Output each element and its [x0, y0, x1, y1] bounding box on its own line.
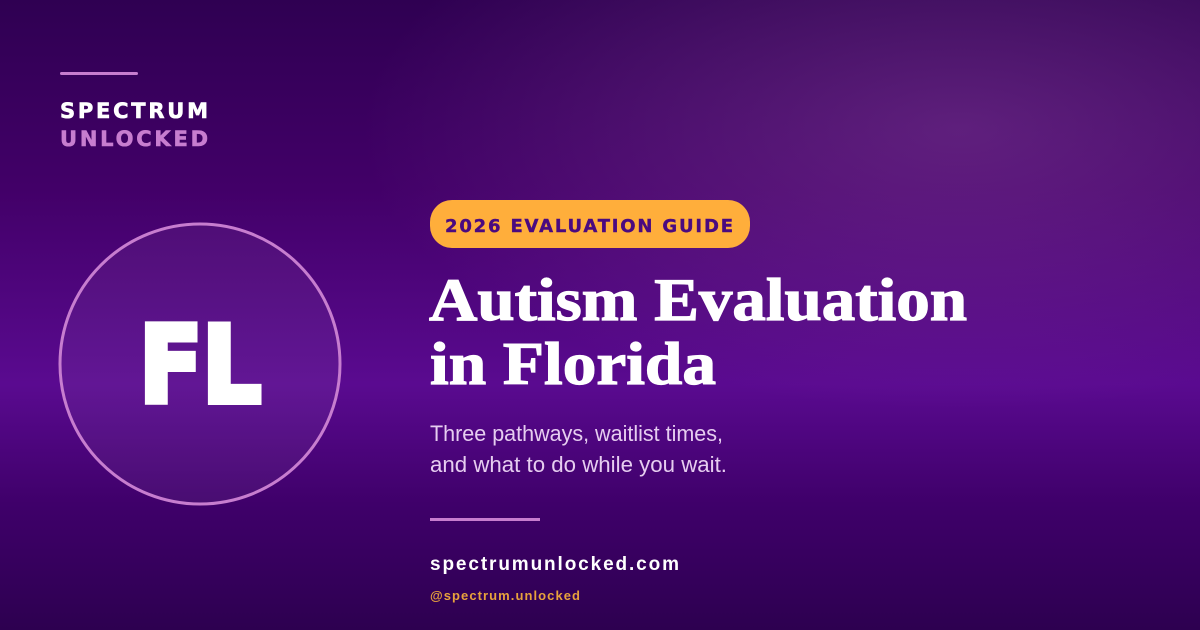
subtitle: [430, 421, 727, 477]
brand name: Spectrum: SPECTRUM: [60, 99, 208, 123]
state badge circle: [60, 224, 340, 504]
brand name: Unlocked: UNLOCKED: [60, 127, 208, 151]
social handle: @spectrum.unlocked: [430, 588, 580, 603]
brand logo block: [60, 72, 208, 151]
website url: spectrumunlocked.com: [430, 554, 679, 575]
badge label: 2026 EVALUATION GUIDE: [445, 216, 733, 237]
subtitle: Three pathways, waitlist times,: [430, 421, 723, 446]
title: in Florida: [430, 331, 716, 397]
guide badge pill: [430, 200, 750, 248]
subtitle: and what to do while you wait.: [430, 452, 727, 477]
title: Autism Evaluation: [429, 267, 967, 333]
state abbreviation: [139, 303, 261, 427]
footer divider: [430, 518, 540, 521]
state abbreviation: L: [202, 303, 261, 427]
state abbreviation: F: [139, 303, 203, 427]
brand accent line: [60, 72, 138, 75]
title: [429, 267, 967, 397]
